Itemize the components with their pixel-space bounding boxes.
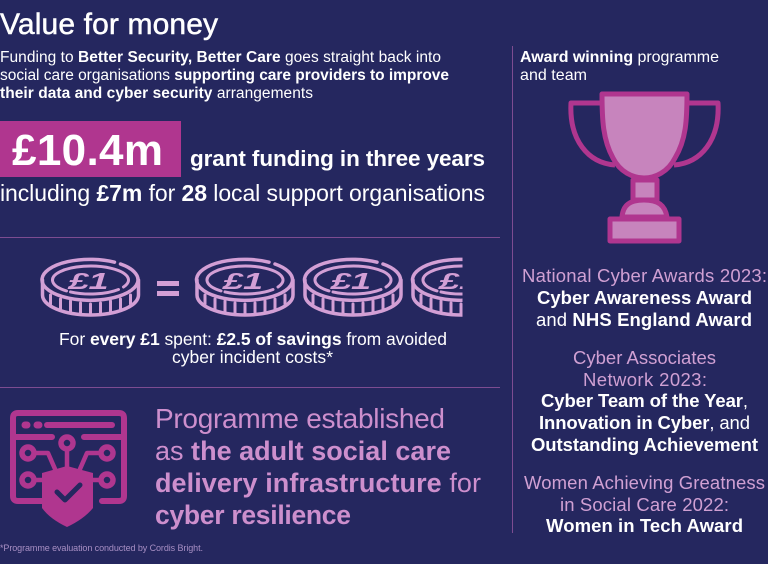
- award: National Cyber Awards: National Cyber Awards 2023:: [522, 265, 767, 286]
- intro text block: [0, 49, 449, 102]
- programme statement: delivery infrastructure for: [155, 468, 481, 498]
- award: Women Achieving Greatness: [524, 472, 765, 536]
- award heading: Award winning programme: [520, 49, 719, 66]
- award: Cyber Associates Network: [531, 347, 758, 455]
- savings text: [59, 329, 447, 367]
- award: Cyber Associates Network: Cyber Associates: [573, 347, 716, 368]
- award heading: [520, 49, 719, 84]
- award: Women Achieving Greatness: Women in Tech Award: [546, 515, 743, 536]
- savings text: cyber incident costs*: [172, 347, 333, 367]
- programme statement: Programme established: [155, 403, 445, 434]
- funding callout: including £7m for 28 local support organisations: [0, 180, 485, 206]
- savings text: For every £1 spent: £2.5 of savings from avoided: [59, 329, 447, 349]
- coin row: [42, 259, 509, 315]
- award heading: and team: [520, 67, 587, 84]
- intro text block: social care organisations supporting care providers to improve: [0, 67, 449, 84]
- intro text block: their data and cyber security arrangements: [0, 85, 313, 102]
- award: Women Achieving Greatness: Women Achieving Greatness: [524, 472, 765, 493]
- award: Cyber Associates Network: Outstanding Achievement: [531, 434, 758, 455]
- icon: cyber security shield: [13, 413, 124, 527]
- funding callout: [0, 121, 485, 206]
- award: Cyber Associates Network: Cyber Team of the Year,: [541, 390, 748, 411]
- award: National Cyber Awards: [522, 265, 767, 330]
- award: Women Achieving Greatness: in Social Care 2022:: [560, 494, 729, 515]
- programme statement: [155, 403, 481, 530]
- icon: partial coin: £1: [437, 268, 479, 294]
- award: Cyber Associates Network: Network 2023:: [583, 369, 707, 390]
- title: Value for money: [0, 8, 218, 41]
- award: National Cyber Awards: and NHS England Award: [536, 309, 752, 330]
- programme statement: cyber resilience: [155, 500, 351, 530]
- icon: coin: [304, 259, 401, 315]
- icon: coin: [196, 259, 293, 315]
- programme statement: as the adult social care: [155, 436, 451, 466]
- equals sign: [157, 281, 179, 296]
- funding callout: grant funding in three years: [190, 146, 485, 171]
- icon: trophy: [571, 94, 718, 241]
- footnote: *Programme evaluation conducted by Cordis Bright.: [0, 543, 203, 553]
- intro text block: Funding to Better Security, Better Care goes straight back into: [0, 49, 441, 66]
- icon: coin: £1: [221, 268, 263, 294]
- icon: partial coin: [410, 258, 462, 317]
- icon: coin: £1: [67, 268, 108, 294]
- award: National Cyber Awards: Cyber Awareness Award: [537, 287, 752, 308]
- icon: coin: [42, 259, 139, 315]
- funding callout: £10.4m: [12, 126, 163, 175]
- award: Cyber Associates Network: Innovation in Cyber, and: [539, 412, 750, 433]
- icon: coin: £1: [329, 268, 371, 294]
